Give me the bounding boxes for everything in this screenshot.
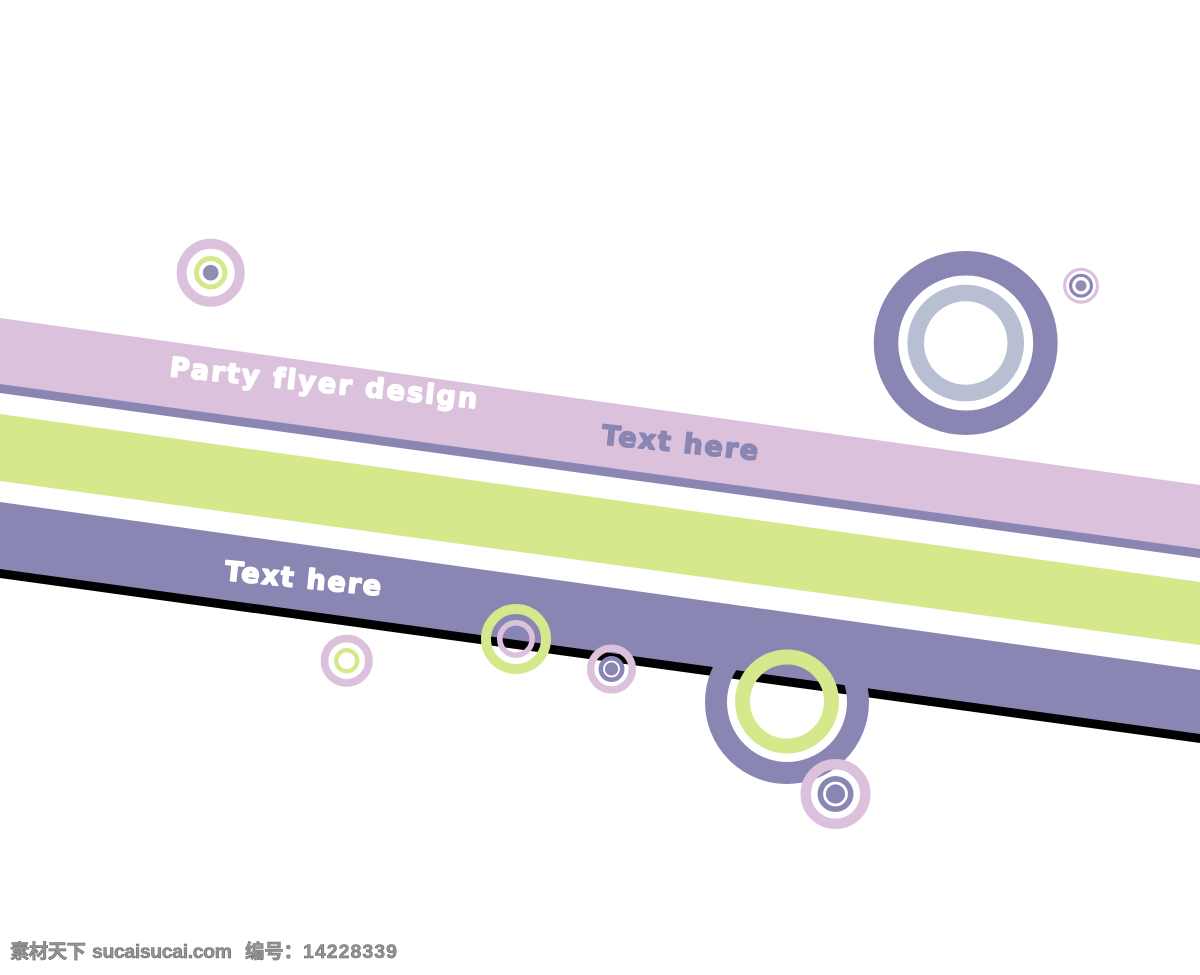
icon: green and pink ring <box>486 609 546 669</box>
icon: lower left ring <box>324 638 369 683</box>
stripe: purple thin band <box>0 375 1200 558</box>
watermark: 14228339 <box>303 941 397 963</box>
watermark: sucaisucai.com <box>92 941 232 963</box>
stripe: green band <box>0 414 1200 645</box>
heading: party flyer design: Party flyer design <box>168 352 479 415</box>
icon: top right small target circle <box>1065 269 1097 302</box>
panel: diagonal stripes <box>0 318 1200 743</box>
icon: top left target circle <box>182 244 240 302</box>
text block: text here on purple: Text here <box>223 556 383 603</box>
stripe: purple band <box>0 502 1200 734</box>
stripe: pink band <box>0 318 1200 549</box>
icon: top right large ring <box>886 263 1045 423</box>
watermark: 编号： <box>245 940 303 963</box>
icon: bottom target circle <box>806 764 865 824</box>
stripe: black shadow <box>0 560 1200 743</box>
icon: middle target circle <box>591 648 632 690</box>
icon: large purple and green ring <box>716 631 858 773</box>
watermark: 素材天下 <box>10 941 86 963</box>
text block: text here on pink: Text here <box>600 420 760 467</box>
